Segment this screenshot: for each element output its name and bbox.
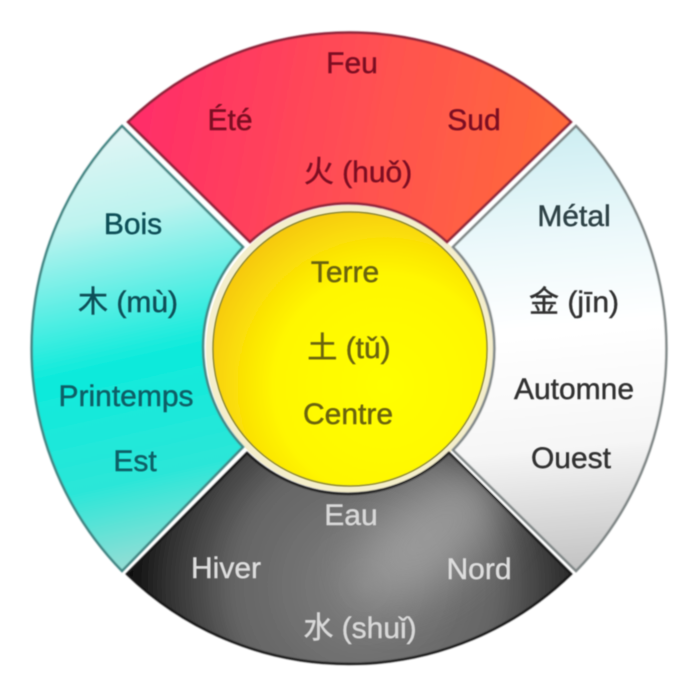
label: Ouest: Ouest <box>531 442 612 475</box>
label: Bois: Bois <box>104 208 162 241</box>
centre backing ring <box>206 205 494 493</box>
label: Hiver: Hiver <box>191 552 261 585</box>
label: Centre: Centre <box>303 398 393 431</box>
label: Automne: Automne <box>514 373 634 406</box>
panel: Eau (water, north, winter) <box>127 446 571 664</box>
label: 火 (huǒ): 火 (huǒ) <box>304 156 412 189</box>
label: Printemps: Printemps <box>58 380 194 413</box>
panel: Terre (earth, centre) <box>213 212 487 486</box>
label: Feu: Feu <box>326 47 378 80</box>
panel: Bois (wood, east, spring) <box>32 126 243 571</box>
label: Sud: Sud <box>447 104 501 137</box>
label: 土 (tǔ): 土 (tǔ) <box>307 332 391 365</box>
label: 金 (jīn): 金 (jīn) <box>529 286 619 319</box>
label: Nord: Nord <box>446 553 512 586</box>
label: Métal: Métal <box>537 200 611 233</box>
panel: Feu (fire, south, summer) <box>128 33 571 242</box>
label: Eau: Eau <box>324 499 378 532</box>
label: Terre: Terre <box>311 256 379 289</box>
label: 木 (mù): 木 (mù) <box>78 286 178 319</box>
label: Été: Été <box>207 104 253 137</box>
label: 水 (shuǐ): 水 (shuǐ) <box>303 612 417 645</box>
label: Est: Est <box>113 445 157 478</box>
panel: Métal (metal, west, autumn) <box>453 126 666 571</box>
